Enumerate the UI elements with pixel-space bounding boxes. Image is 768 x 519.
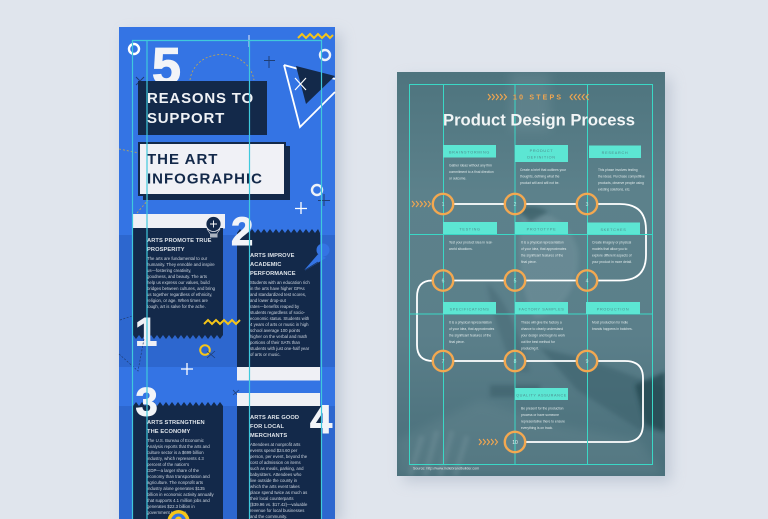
- subheading: 10 steps: 10 STEPS: [513, 94, 563, 102]
- step label: quality assurance: QUALITY ASSURANCE: [516, 394, 567, 398]
- step text: prototype: the significant features of the: [521, 254, 563, 258]
- card 1: arts promote true prosperity: us—fostering creativity,: [147, 268, 191, 273]
- heading: reasons to support: REASONS TO: [147, 90, 254, 107]
- step label: factory samples: [515, 302, 568, 314]
- card 3: arts strengthen the economy: economy than transportation and: [147, 474, 210, 479]
- step numbers: 1: [442, 202, 445, 208]
- decorative dashed arcs: [119, 54, 254, 213]
- step numbers: 10: [512, 440, 518, 446]
- step text: sketches: Create imagery or physical: [592, 240, 631, 244]
- step text: factory samples: These will give the factory a: [521, 320, 562, 324]
- step text: prototype: of your idea, that approximates: [521, 247, 567, 251]
- card 3: arts strengthen the economy: generates $22.3 billion in: [147, 504, 195, 509]
- step label: production: [586, 302, 640, 314]
- chevrons: start: [412, 201, 430, 207]
- card 1: arts promote true prosperity: ARTS PROMOTE TRUE: [147, 238, 212, 244]
- step text: production: [592, 320, 633, 331]
- big numeral 5: 5: [152, 38, 181, 96]
- card 3: arts strengthen the economy: [133, 402, 223, 519]
- step text: factory samples: out the best method for: [521, 340, 556, 344]
- chevrons: top right: [570, 94, 588, 100]
- step text: brainstorming: Gather ideas without any firm: [449, 164, 492, 168]
- step label: research: [589, 146, 641, 158]
- big numeral 1: 1: [135, 310, 157, 354]
- step text: factory samples: producing it.: [521, 346, 539, 350]
- card 3: arts strengthen the economy: agriculture. The nonprofit arts: [147, 480, 203, 485]
- card 3: arts strengthen the economy: that supports 4.1 million jobs and: [147, 498, 210, 503]
- layout guides: [409, 84, 653, 465]
- card 3: arts strengthen the economy: billion in economic activity annually: [147, 492, 214, 497]
- card 1: arts promote true prosperity: bridges between cultures, and bring: [147, 286, 216, 291]
- step label: prototype: PROTOTYPE: [527, 228, 556, 232]
- step text: sketches: your product in more detail.: [592, 260, 632, 264]
- step numbers: [442, 202, 589, 446]
- card 4: arts are good for local merchants: Attendees at nonprofit arts: [250, 442, 300, 447]
- step text: research: the ideas. Purchase competitive: [598, 174, 645, 178]
- card 3: arts strengthen the economy: ARTS STRENGTHEN: [147, 420, 205, 426]
- step text: factory samples: your design and begin to work: [521, 334, 565, 338]
- card 1: arts promote true prosperity: goodness, and beauty. The arts: [147, 274, 207, 279]
- step numbers: 3: [586, 202, 589, 208]
- step text: product definition: thoughts, defining what the: [520, 174, 560, 178]
- card 1: arts promote true prosperity: The arts are fundamental to our: [147, 256, 208, 261]
- step text: sketches: [592, 240, 632, 264]
- card 2: arts improve academic performance: ARTS IMPROVE: [250, 253, 295, 259]
- step text: production: Most production for indie: [592, 320, 628, 324]
- step text: testing: world situations.: [449, 247, 473, 251]
- step label: production: PRODUCTION: [597, 308, 629, 312]
- layout guides: [132, 40, 322, 519]
- step numbers: 2: [514, 202, 517, 208]
- card 3: arts strengthen the economy: government revenue.: [147, 510, 188, 515]
- icon: plus marks: [136, 35, 330, 375]
- step numbers: 7: [442, 359, 445, 365]
- step text: product definition: [520, 168, 567, 185]
- icon: yellow ring: [200, 345, 210, 355]
- card 4: arts are good for local merchants: [237, 406, 321, 519]
- step label: specifications: [443, 302, 496, 314]
- card 2: arts improve academic performance: ACADEMIC: [250, 262, 281, 268]
- chevrons: end: [479, 439, 498, 445]
- big numeral 4: 4: [310, 398, 333, 442]
- step numbers: 8: [514, 359, 517, 365]
- step text: quality assurance: process or have someone: [521, 413, 559, 417]
- card 4: arts are good for local merchants: cost of admission on items: [250, 460, 301, 465]
- card 3: arts strengthen the economy: industry alone generates $135: [147, 486, 205, 491]
- step text: brainstorming: or outcome.: [449, 176, 466, 180]
- icon: light bulb: [206, 216, 221, 238]
- step text: specifications: It is a physical representation: [449, 320, 492, 324]
- card 4: arts are good for local merchants: MERCHANTS: [250, 433, 287, 439]
- step text: prototype: It is a physical representation: [521, 240, 564, 244]
- heading: reasons to support: [138, 81, 267, 135]
- icon: yellow zigzag middle: [204, 320, 240, 324]
- card 4: arts are good for local merchants: live outside the county in: [250, 478, 298, 483]
- step markers: [433, 194, 597, 452]
- card 1: arts promote true prosperity: us together regardless of ethnicity,: [147, 292, 212, 297]
- step text: specifications: final piece.: [449, 340, 465, 344]
- step numbers: 4: [586, 278, 589, 284]
- step text: testing: [449, 240, 492, 251]
- card 4: arts are good for local merchants: their local counterparts: [250, 496, 293, 501]
- step label: quality assurance: [515, 388, 568, 400]
- card 1: arts promote true prosperity: help us express our values, build: [147, 280, 210, 285]
- decorative dashes: [119, 316, 144, 371]
- card 1: arts promote true prosperity: PROSPERITY: [147, 247, 185, 253]
- step label: brainstorming: BRAINSTORMING: [449, 150, 490, 154]
- step label: product definition: DEFINITION: [527, 156, 556, 160]
- heading: the art infographic: INFOGRAPHIC: [147, 170, 263, 188]
- card 2: arts improve academic performance: in the arts have higher GPAs: [250, 286, 305, 291]
- heading: reasons to support: SUPPORT: [147, 110, 225, 127]
- white bar: [237, 393, 320, 406]
- card 4: arts are good for local merchants: ($39.96 vs. $17.42)—valuable: [250, 502, 308, 507]
- step label: sketches: [587, 222, 640, 234]
- step text: factory samples: [521, 320, 565, 350]
- step text: quality assurance: [521, 406, 565, 430]
- card 4: arts are good for local merchants: events spend $24.60 per: [250, 448, 298, 453]
- card 2: arts improve academic performance: Students with an education rich: [250, 280, 310, 285]
- step text: testing: Test your product idea in real-: [449, 240, 492, 244]
- step text: prototype: [521, 240, 567, 264]
- card 2: arts improve academic performance: economic status. Students with: [250, 316, 310, 321]
- title: Product Design Process: [443, 110, 635, 130]
- card 3: arts strengthen the economy: Analysis reports that the arts and: [147, 444, 210, 449]
- step label: sketches: SKETCHES: [600, 228, 627, 232]
- step text: research: This phase involves testing: [598, 168, 638, 172]
- card 3: arts strengthen the economy: GDP—a larger share of the: [147, 468, 200, 473]
- panel: product design process poster: [397, 72, 671, 482]
- step numbers: 9: [586, 359, 589, 365]
- card 1: arts promote true prosperity: humanity. They ennoble and inspire: [147, 262, 215, 267]
- step text: production: brands happens in batches.: [592, 327, 633, 331]
- card 2: arts improve academic performance: of arts or music.: [250, 352, 281, 357]
- chevrons: top left: [488, 94, 506, 100]
- panel: art infographic poster: [119, 27, 341, 519]
- icon: yellow badge: [168, 510, 190, 519]
- step label: research: RESEARCH: [602, 151, 628, 155]
- step label: prototype: [515, 222, 568, 234]
- step numbers: 5: [514, 278, 517, 284]
- card 2: arts improve academic performance: and lower drop-out: [250, 298, 287, 303]
- step label: testing: TESTING: [459, 228, 481, 232]
- card 2: arts improve academic performance: students with just one-half year: [250, 346, 310, 351]
- step text: research: products, observe people using: [598, 181, 644, 185]
- card 2: arts improve academic performance: rates—benefits reaped by: [250, 304, 300, 309]
- card 2: arts improve academic performance: school average 100 points: [250, 328, 300, 333]
- step text: quality assurance: Be present for the production: [521, 406, 564, 410]
- card 4: arts are good for local merchants: babysitters. Attendees who: [250, 472, 302, 477]
- card 1: arts promote true prosperity: [133, 214, 225, 339]
- background photo: hand holding shoe: [397, 72, 665, 476]
- big numeral 3: 3: [136, 380, 158, 424]
- card 4: arts are good for local merchants: FOR LOCAL: [250, 424, 284, 430]
- icon: yellow zigzag top: [298, 34, 333, 38]
- card 4: arts are good for local merchants: person, per event, beyond the: [250, 454, 308, 459]
- icon: cone with ball: [305, 244, 330, 270]
- icon: ring top left: [129, 44, 139, 54]
- step label: testing: [443, 222, 497, 234]
- card 4: arts are good for local merchants: and the community.: [250, 514, 287, 519]
- step text: brainstorming: [449, 164, 494, 180]
- step text: specifications: [449, 320, 495, 344]
- step numbers: 6: [442, 278, 445, 284]
- process path: [417, 204, 646, 442]
- card 1: arts promote true prosperity: religion, or age. When times are: [147, 298, 209, 303]
- step text: factory samples: chance to clearly understand: [521, 327, 563, 331]
- step text: specifications: of your idea, that approximates: [449, 327, 495, 331]
- icon: ring top right: [320, 50, 330, 60]
- step text: quality assurance: everything is on track.: [521, 426, 553, 430]
- step label: brainstorming: [443, 145, 496, 158]
- card 3: arts strengthen the economy: industry, which represents 4.3: [147, 456, 204, 461]
- card 3: arts strengthen the economy: percent of the nation's: [147, 462, 189, 467]
- card 4: arts are good for local merchants: such as meals, parking, and: [250, 466, 304, 471]
- step label: specifications: SPECIFICATIONS: [450, 308, 489, 312]
- card 2: arts improve academic performance: students regardless of socio-: [250, 310, 306, 315]
- step label: product definition: [515, 145, 568, 162]
- step text: specifications: the significant features of the: [449, 334, 491, 338]
- heading: the art infographic: THE ART: [147, 151, 218, 168]
- card 4: arts are good for local merchants: ARTS ARE GOOD: [250, 415, 299, 421]
- step label: factory samples: FACTORY SAMPLES: [519, 308, 564, 312]
- step label: product definition: PRODUCT: [530, 149, 553, 153]
- card 2: arts improve academic performance: higher on the verbal and math: [250, 334, 308, 339]
- step text: brainstorming: commitment to a final direction: [449, 170, 494, 174]
- card 4: arts are good for local merchants: which the arts event takes: [250, 484, 300, 489]
- heading: the art infographic: [139, 143, 290, 200]
- icon: ring mid right: [312, 185, 322, 195]
- card 2: arts improve academic performance: portions of their SATs than: [250, 340, 301, 345]
- card 2: arts improve academic performance: 4 years of arts or music in high: [250, 322, 309, 327]
- card 4: arts are good for local merchants: place spend twice as much as: [250, 490, 307, 495]
- step text: sketches: models that allow you to: [592, 247, 628, 251]
- step marker backgrounds: [433, 194, 597, 452]
- card 2: arts improve academic performance: PERFORMANCE: [250, 271, 296, 277]
- card 2: arts improve academic performance: [237, 229, 320, 380]
- card 3: arts strengthen the economy: culture sector is a $699 billion: [147, 450, 204, 455]
- step text: research: existing solutions, etc.: [598, 188, 630, 192]
- card 4: arts are good for local merchants: revenue for local businesses: [250, 508, 304, 513]
- step text: sketches: explore different aspects of: [592, 254, 632, 258]
- card 1: arts promote true prosperity: tough, art is salve for the ache.: [147, 304, 206, 309]
- step text: product definition: Create a brief that outlines your: [520, 168, 567, 172]
- icon: triangles: [284, 65, 335, 127]
- step text: research: [598, 168, 645, 192]
- step text: prototype: final piece.: [521, 260, 537, 264]
- big numeral 2: 2: [231, 210, 253, 254]
- source note: Source: http://www.indiebrandbuilder.com: [413, 466, 479, 470]
- step text: product definition: product will and will not be.: [520, 181, 559, 185]
- card 3: arts strengthen the economy: THE ECONOMY: [147, 429, 191, 435]
- card 3: arts strengthen the economy: The U.S. Bureau of Economic: [147, 438, 205, 443]
- step text: quality assurance: representative there to ensure: [521, 420, 565, 424]
- card 2: arts improve academic performance: and standardized test scores,: [250, 292, 306, 297]
